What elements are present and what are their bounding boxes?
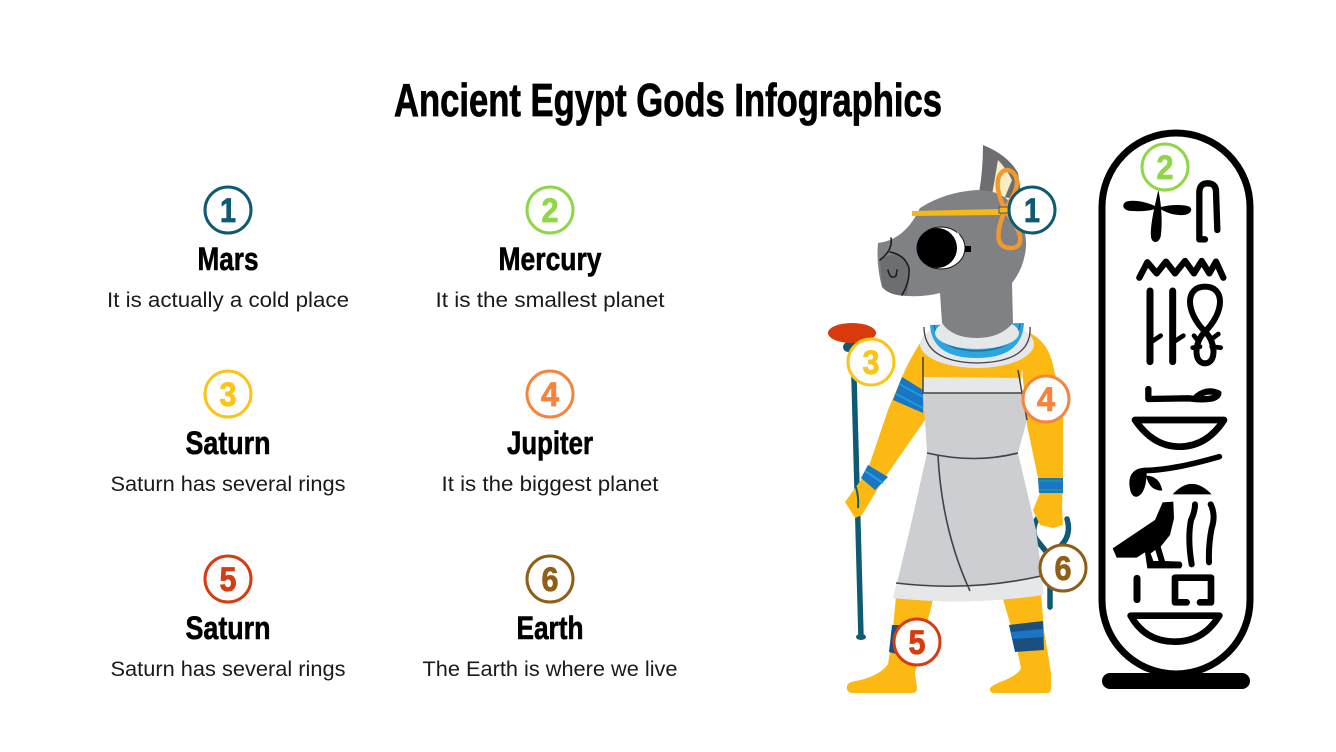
arms and shoulders	[845, 333, 1063, 528]
description: Earth: The Earth is where we live	[422, 658, 678, 681]
cartouche frame	[1102, 133, 1250, 674]
callout marker 2: 2	[1156, 149, 1174, 187]
collar necklace	[920, 317, 1034, 368]
staff	[828, 323, 876, 640]
head and neck	[878, 145, 1026, 338]
torso and kilt	[893, 345, 1043, 601]
headband	[912, 209, 1000, 216]
callout marker 1: 1	[1024, 192, 1040, 230]
list item 4: Jupiter	[442, 371, 659, 496]
description: Jupiter: It is the biggest planet	[442, 473, 659, 496]
callout marker 1	[1009, 187, 1055, 233]
description: Saturn: Saturn has several rings	[110, 658, 346, 681]
number badge 2	[527, 187, 573, 233]
list item 5: Saturn	[110, 556, 346, 681]
number badge 3: 3	[220, 376, 236, 414]
callout marker 6: 6	[1054, 550, 1072, 588]
number badge 6	[527, 556, 573, 602]
legs and feet	[847, 592, 1051, 693]
list item 2: Mercury	[436, 187, 665, 312]
callout marker 5	[894, 619, 940, 665]
heading: Saturn: Saturn	[186, 425, 270, 461]
number badge 5	[205, 556, 251, 602]
list item 6: Earth	[422, 556, 678, 681]
hieroglyphs lower	[1113, 420, 1224, 642]
callout marker 6	[1040, 545, 1086, 591]
callout marker 3: 3	[862, 344, 880, 382]
cartouche with hieroglyphs	[1102, 133, 1250, 689]
eye	[917, 227, 971, 269]
orange knot amulet	[998, 170, 1020, 248]
callout marker 3	[848, 339, 894, 385]
number badge 5: 5	[220, 561, 236, 599]
callout marker 5: 5	[908, 624, 926, 662]
illustration: cat-headed goddess figure	[828, 145, 1068, 693]
number badge 4: 4	[541, 376, 559, 414]
description: Mars: It is actually a cold place	[107, 289, 349, 312]
heading: Jupiter: Jupiter	[507, 425, 593, 461]
callout marker 2	[1142, 144, 1188, 190]
callout marker 4	[1023, 376, 1069, 422]
heading: Saturn: Saturn	[186, 610, 270, 646]
description: Saturn: Saturn has several rings	[110, 473, 346, 496]
number badge 3	[205, 371, 251, 417]
list item 1: Mars	[107, 187, 349, 312]
cartouche base	[1102, 673, 1250, 689]
heading: Mercury: Mercury	[498, 241, 602, 277]
hieroglyphs upper	[1123, 183, 1223, 399]
number badge 6: 6	[542, 561, 558, 599]
heading: Mars: Mars	[198, 241, 258, 277]
heading: Earth: Earth	[516, 610, 584, 646]
number badge 4	[527, 371, 573, 417]
number badge 1	[205, 187, 251, 233]
ankh held in hand	[1033, 519, 1068, 607]
title: Ancient Egypt Gods Infographics	[394, 74, 942, 126]
list item 3: Saturn	[110, 371, 346, 496]
description: Mercury: It is the smallest planet	[436, 289, 665, 312]
callout marker 4: 4	[1037, 381, 1055, 419]
number badge 1: 1	[220, 192, 236, 230]
number badge 2: 2	[542, 192, 558, 230]
